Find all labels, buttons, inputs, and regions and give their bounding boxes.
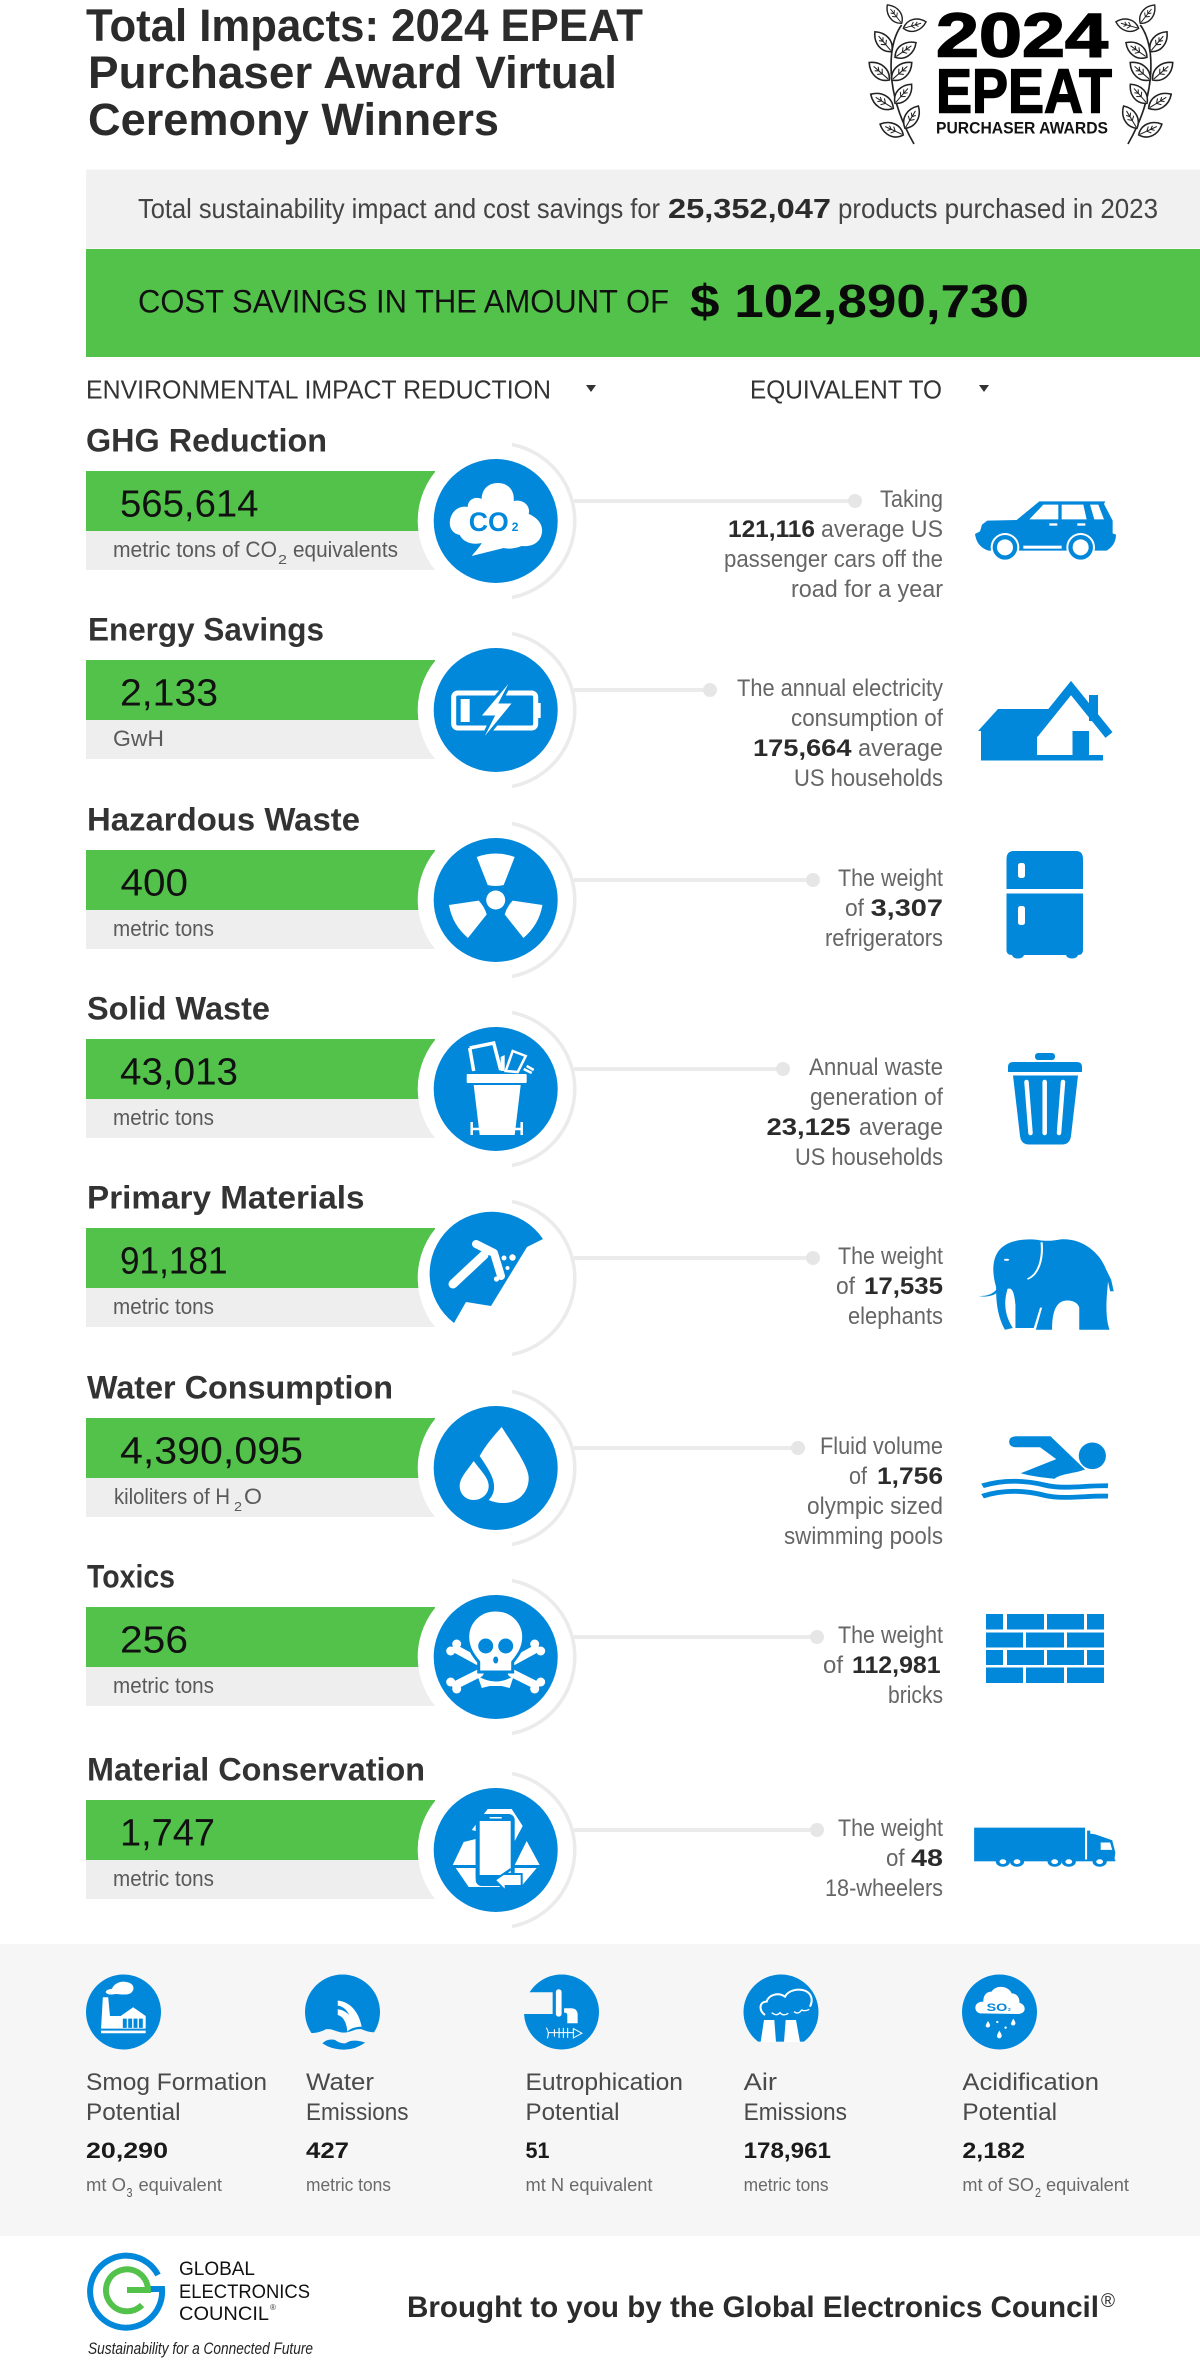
text: air emissions: Emissions	[744, 2099, 847, 2126]
icon: refrigerator	[1006, 851, 1083, 958]
text: equivalent elephants: of	[836, 1273, 855, 1300]
text: equivalent elephants: elephants	[848, 1303, 943, 1330]
text: equivalent swimming pools: Fluid volume	[820, 1433, 943, 1460]
icon: trash can	[1008, 1053, 1082, 1144]
icon: acidification SO2 cloud: 2	[1008, 2007, 1011, 2013]
heading: Material Conservation	[87, 1752, 425, 1788]
text: equivalent waste: average	[859, 1114, 943, 1141]
text: equivalent waste: Annual waste	[809, 1054, 943, 1081]
value bar: kiloliters of H	[114, 1484, 230, 1509]
icon: CO2 cloud: 2	[512, 520, 519, 534]
text: equivalent households: The annual electricity	[737, 675, 943, 702]
text: equivalent swimming pools: 1,756	[877, 1463, 943, 1490]
text: acidification: 2	[1035, 2185, 1041, 2200]
title: Purchaser Award Virtual	[88, 47, 617, 98]
value bar: 2	[234, 1499, 242, 1514]
value bar: metric tons of CO	[113, 537, 277, 562]
value bar: 256	[120, 1620, 188, 1662]
text: council name	[179, 2259, 310, 2325]
text: acidification: Potential	[962, 2099, 1057, 2126]
text: equivalent refrigerators: of	[845, 895, 864, 922]
text: council name: GLOBAL	[179, 2259, 255, 2280]
icon: CO2 cloud: CO	[469, 507, 509, 537]
value bar: 43,013	[120, 1052, 238, 1094]
text: smog formation: equivalent	[138, 2175, 222, 2195]
title: Ceremony Winners	[88, 94, 499, 145]
text: equivalent cars: Taking	[880, 486, 943, 513]
panel: total products summary	[86, 170, 1200, 248]
text: equivalent swimming pools: olympic sized	[807, 1493, 943, 1520]
text: eutrophication: mt N equivalent	[526, 2175, 652, 2195]
heading: Hazardous Waste	[87, 802, 360, 838]
icon: water drops	[434, 1406, 558, 1530]
text: equivalent waste: US households	[795, 1144, 943, 1171]
heading: Toxics	[87, 1558, 175, 1594]
text: equivalent cars: 121,116	[728, 516, 815, 543]
text: equivalent elephants	[836, 1243, 943, 1330]
value bar: metric tons	[113, 1294, 214, 1319]
value bar	[86, 1228, 435, 1327]
text: equivalent refrigerators: refrigerators	[825, 925, 943, 952]
text: equivalent bricks: of	[823, 1652, 843, 1679]
text: equivalent elephants: 17,535	[864, 1273, 943, 1300]
value bar	[86, 850, 435, 949]
panel: total products summary: Total sustainability impact and cost savings for	[138, 193, 660, 224]
icon: elephant	[978, 1239, 1114, 1330]
text: air emissions: Air	[744, 2069, 777, 2096]
text: water emissions: 427	[306, 2138, 349, 2163]
heading: Primary Materials	[87, 1180, 364, 1216]
award name: EPEAT	[936, 58, 1112, 126]
text: equivalent waste: 23,125	[766, 1114, 850, 1141]
icon: truck	[974, 1828, 1115, 1865]
panel: Water Consumption	[86, 1370, 943, 1550]
icon: brick wall	[986, 1614, 1104, 1683]
panel: total products summary: products purchased in 2023	[838, 193, 1158, 224]
text: equivalent households: consumption of	[791, 705, 943, 732]
value bar: equivalents	[293, 537, 398, 562]
value bar: 400	[120, 862, 188, 904]
heading: Water Consumption	[87, 1370, 393, 1406]
value bar: 2	[278, 552, 287, 567]
text: acidification	[962, 2069, 1129, 2200]
value bar: 2,133	[120, 672, 218, 714]
footer credit: ®	[1101, 2291, 1115, 2312]
value bar: GwH	[113, 726, 164, 751]
text: equivalent households: average	[858, 735, 943, 762]
heading: GHG Reduction	[86, 422, 327, 458]
text: council name: ELECTRONICS	[179, 2282, 310, 2303]
text: acidification: equivalent	[1046, 2175, 1129, 2195]
column headers	[86, 374, 989, 404]
text: eutrophication: Eutrophication	[526, 2069, 683, 2096]
panel: Solid Waste	[86, 990, 943, 1171]
icon: house	[978, 688, 1109, 760]
text: eutrophication: 51	[526, 2138, 550, 2163]
value bar: 91,181	[120, 1240, 228, 1282]
text: smog formation: Smog Formation	[86, 2069, 267, 2096]
text: air emissions: metric tons	[744, 2175, 829, 2195]
text: air emissions	[744, 2069, 847, 2195]
text: equivalent swimming pools: of	[849, 1463, 867, 1490]
icon: right laurel	[1114, 1, 1177, 144]
text: smog formation: 20,290	[86, 2138, 168, 2163]
icon: CO2 cloud	[434, 459, 558, 583]
icon: recycling phone	[434, 1788, 558, 1912]
icon: left laurel	[865, 1, 928, 144]
text: water emissions	[306, 2069, 408, 2195]
text: equivalent households: US households	[794, 765, 943, 792]
value bar: 4,390,095	[120, 1430, 303, 1472]
value bar: 565,614	[120, 484, 258, 526]
value bar: O	[244, 1484, 262, 1509]
text: equivalent refrigerators: The weight	[838, 865, 943, 892]
text: equivalent elephants: The weight	[838, 1243, 943, 1270]
text: equivalent households	[737, 675, 943, 792]
text: eutrophication	[526, 2069, 683, 2195]
icon: hammer on rock	[430, 1212, 543, 1323]
text: eutrophication: Potential	[526, 2099, 620, 2126]
text: equivalent bricks: 112,981	[852, 1652, 941, 1679]
text: equivalent 18-wheelers: 18-wheelers	[825, 1875, 943, 1902]
text: equivalent 18-wheelers: 48	[911, 1845, 943, 1872]
icon: water emissions	[299, 1974, 387, 2055]
column headers: ENVIRONMENTAL IMPACT REDUCTION	[86, 374, 551, 404]
logo: 2024 EPEAT Purchaser Awards	[865, 1, 1177, 144]
text: council name: ®	[270, 2303, 276, 2312]
panel: total products summary: 25,352,047	[668, 193, 831, 224]
panel: Toxics	[86, 1558, 943, 1735]
text: smog formation: mt O	[86, 2175, 126, 2195]
text: air emissions: 178,961	[744, 2138, 831, 2163]
text: acidification: 2,182	[962, 2138, 1025, 2163]
text: equivalent swimming pools	[784, 1433, 943, 1550]
text: water emissions: metric tons	[306, 2175, 391, 2195]
heading: Energy Savings	[88, 612, 324, 648]
value bar	[86, 1800, 435, 1899]
icon: skull and crossbones	[434, 1595, 558, 1719]
value bar	[86, 660, 435, 759]
title: Total Impacts: 2024 EPEAT	[86, 0, 643, 51]
value bar: metric tons	[113, 1673, 214, 1698]
panel: cost savings: COST SAVINGS IN THE AMOUNT OF	[138, 284, 669, 320]
text: equivalent waste: generation of	[810, 1084, 943, 1111]
icon: acidification SO2 cloud	[962, 1974, 1037, 2050]
value bar	[86, 471, 435, 570]
panel: Material Conservation	[86, 1752, 943, 1928]
value bar	[86, 1039, 435, 1138]
icon: car	[975, 501, 1116, 562]
text: equivalent refrigerators: 3,307	[871, 895, 943, 922]
text: equivalent cars: road for a year	[791, 576, 943, 603]
text: tagline: Sustainability for a Connected Future	[88, 2339, 313, 2358]
panel: cost savings: $ 102,890,730	[690, 275, 1029, 327]
award subtitle: PURCHASER AWARDS	[936, 118, 1108, 138]
text: equivalent 18-wheelers: of	[886, 1845, 905, 1872]
text: equivalent cars: passenger cars off the	[724, 546, 943, 573]
text: equivalent cars	[724, 486, 943, 603]
text: equivalent 18-wheelers: The weight	[838, 1815, 943, 1842]
icon: air emissions	[740, 1974, 823, 2055]
icon: recycling bin with electronics	[434, 1027, 558, 1151]
icon: battery with bolt	[434, 648, 558, 772]
title	[86, 0, 643, 145]
text: equivalent bricks: bricks	[888, 1682, 943, 1709]
text: equivalent 18-wheelers	[825, 1815, 943, 1902]
footer credit: Brought to you by the Global Electronics Council	[407, 2291, 1099, 2324]
icon: eutrophication	[521, 1974, 599, 2050]
value bar: metric tons	[113, 916, 214, 941]
text: acidification: mt of SO	[962, 2175, 1034, 2195]
text: equivalent bricks	[823, 1622, 943, 1709]
value bar	[86, 1418, 435, 1517]
panel: cost savings	[86, 249, 1200, 357]
text: acidification: Acidification	[962, 2069, 1099, 2096]
panel: additional impacts	[0, 1944, 1200, 2236]
column headers: EQUIVALENT TO	[750, 374, 942, 404]
icon: swimmer	[982, 1436, 1108, 1497]
value bar	[86, 1607, 435, 1706]
award year: 2024	[936, 2, 1109, 70]
icon: smog factory	[86, 1974, 161, 2050]
panel: Energy Savings	[86, 612, 943, 792]
text: water emissions: Emissions	[306, 2099, 408, 2126]
text: equivalent households: 175,664	[753, 735, 852, 762]
icon: acidification SO2 cloud: SO	[987, 2002, 1008, 2014]
text: smog formation: 3	[126, 2185, 132, 2200]
value bar: metric tons	[113, 1105, 214, 1130]
value bar: metric tons	[113, 1866, 214, 1891]
icon: radiation	[434, 838, 558, 962]
text: water emissions: Water	[306, 2069, 374, 2096]
text: council name: COUNCIL	[179, 2304, 269, 2325]
panel: Hazardous Waste	[86, 802, 943, 978]
text: equivalent refrigerators	[825, 865, 943, 952]
text: smog formation: Potential	[86, 2099, 180, 2126]
panel: GHG Reduction	[86, 422, 943, 603]
text: equivalent cars: average US	[821, 516, 943, 543]
value bar: 1,747	[120, 1812, 215, 1854]
panel: Primary Materials	[86, 1180, 943, 1356]
heading: Solid Waste	[87, 990, 270, 1026]
text: equivalent waste	[766, 1054, 943, 1171]
icon: GEC mark	[90, 2256, 162, 2328]
logo: Global Electronics Council	[88, 2256, 313, 2358]
text: smog formation	[86, 2069, 267, 2200]
text: equivalent bricks: The weight	[838, 1622, 943, 1649]
text: equivalent swimming pools: swimming pools	[784, 1523, 943, 1550]
